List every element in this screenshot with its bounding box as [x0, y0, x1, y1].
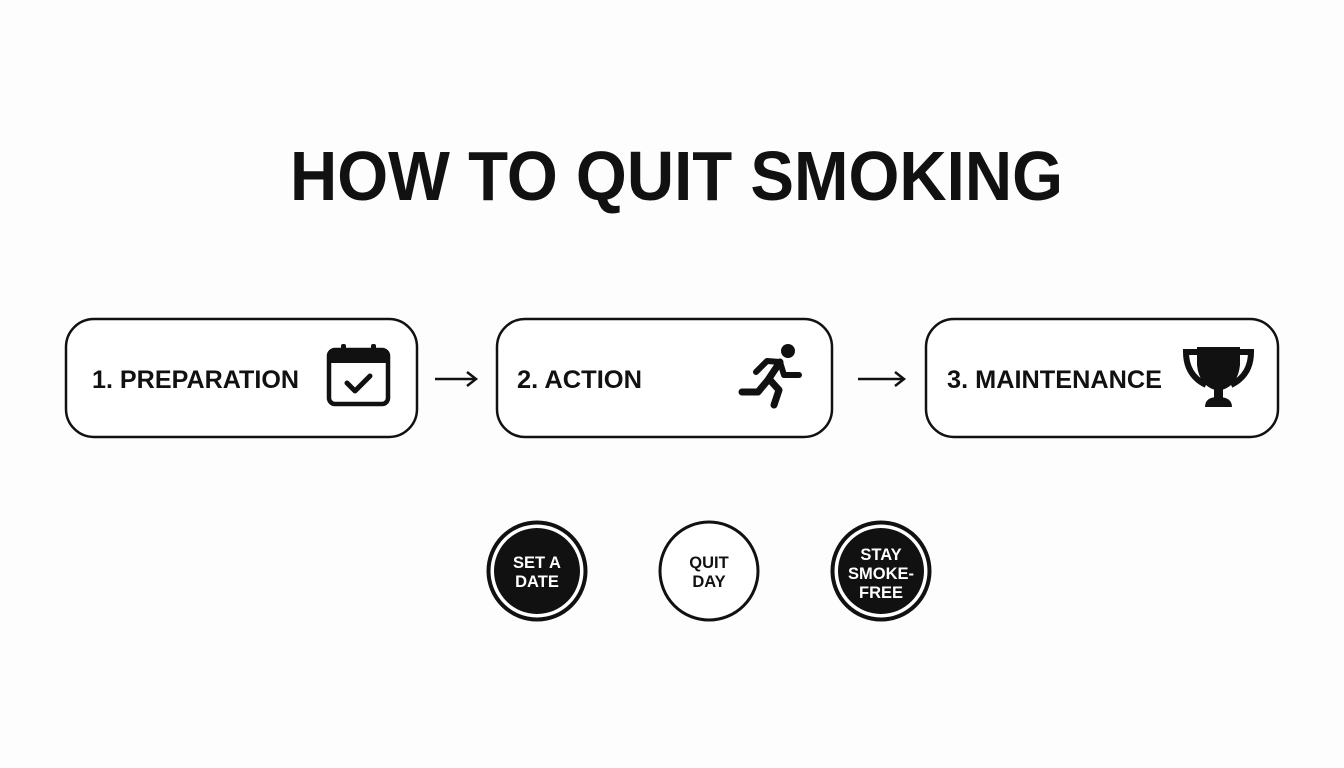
arrow 2: [858, 372, 904, 386]
milestone: set a date: DATE: [515, 573, 559, 591]
panel: maintenance: 3. MAINTENANCE: [947, 366, 1162, 394]
milestone: stay smoke-free: FREE: [859, 584, 903, 602]
panel: action: [497, 319, 832, 437]
title: HOW TO QUIT SMOKING: [290, 137, 1063, 215]
milestone: quit day: [660, 522, 758, 620]
milestone: quit day: DAY: [692, 573, 726, 591]
icon: running person: [742, 344, 799, 405]
arrow 1: [435, 372, 476, 386]
icon: calendar: [329, 344, 388, 404]
milestone: stay smoke-free: [832, 522, 930, 620]
milestone: stay smoke-free: SMOKE-: [848, 565, 914, 583]
panel: preparation: 1. PREPARATION: [92, 366, 299, 394]
milestone: set a date: [488, 522, 586, 620]
panel: preparation: [66, 319, 417, 437]
milestone: quit day: QUIT: [689, 554, 729, 572]
milestone: stay smoke-free: STAY: [860, 546, 902, 564]
panel: maintenance: [926, 319, 1278, 437]
icon: trophy: [1186, 347, 1251, 407]
panel: action: 2. ACTION: [517, 366, 642, 394]
milestone: set a date: SET A: [513, 554, 561, 572]
